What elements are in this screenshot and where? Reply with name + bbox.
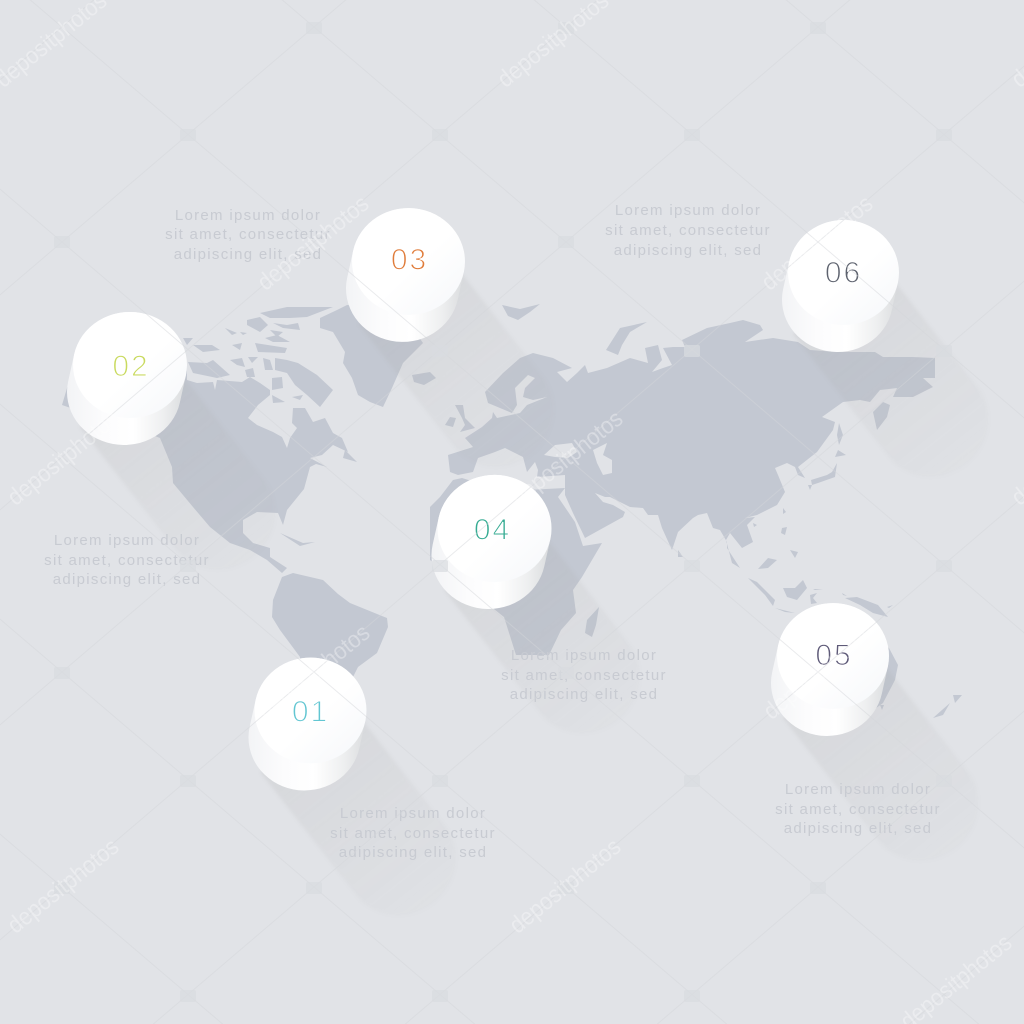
shadow: 05 xyxy=(783,648,978,861)
text: 01: Lorem ipsum dolor xyxy=(340,805,486,822)
text: 04: adipiscing elit, sed xyxy=(510,686,658,703)
continent: Eurasia xyxy=(448,320,935,568)
marker 01: 01 xyxy=(292,696,329,728)
arctic islands xyxy=(183,307,357,546)
text: 06: Lorem ipsum dolor xyxy=(615,202,761,219)
sea cut-outs xyxy=(544,443,612,475)
islands: Sri Lanka, Japan, Sakhalin, Kamchatka side xyxy=(678,402,890,557)
shadow: 03 xyxy=(358,254,554,467)
watermark: depositphotos xyxy=(2,833,124,939)
marker 06 xyxy=(788,220,899,325)
watermark: depositphotos xyxy=(758,619,880,725)
text: 05: sit amet, consectetur xyxy=(775,801,941,818)
island: Greenland xyxy=(320,305,423,407)
marker 05: 05 xyxy=(815,639,853,672)
text: 03: sit amet, consectetur xyxy=(165,226,331,243)
text: 03: Lorem ipsum dolor xyxy=(175,207,321,224)
text: 05: adipiscing elit, sed xyxy=(784,820,932,837)
long shadows xyxy=(80,254,988,915)
shadow: 01 xyxy=(260,702,456,915)
text: 03: adipiscing elit, sed xyxy=(174,246,322,263)
marker 04: 04 xyxy=(474,514,511,546)
island: Madagascar xyxy=(585,607,599,637)
marker 05 xyxy=(777,603,889,709)
continent: Africa xyxy=(430,478,602,655)
marker 06: 06 xyxy=(825,256,862,290)
watermark: depositphotos xyxy=(756,190,878,296)
text: 05: Lorem ipsum dolor xyxy=(785,781,931,798)
shadow: 04 xyxy=(444,520,640,733)
text: 04: Lorem ipsum dolor xyxy=(511,647,657,664)
text: 02: Lorem ipsum dolor xyxy=(54,532,200,549)
continent: South America xyxy=(272,573,388,720)
text: 06: adipiscing elit, sed xyxy=(614,242,762,259)
text: 02: sit amet, consectetur xyxy=(44,552,210,569)
island: New Guinea xyxy=(842,593,893,617)
text: 04: sit amet, consectetur xyxy=(501,667,667,684)
watermark: depositphotos xyxy=(252,190,374,296)
marker 01 xyxy=(254,658,366,763)
marker 02: 02 xyxy=(112,350,150,383)
islands: South East Asia xyxy=(748,508,823,613)
continent: North America xyxy=(62,360,348,573)
text: 02: adipiscing elit, sed xyxy=(53,571,201,588)
text: 01: sit amet, consectetur xyxy=(330,825,496,842)
text: 06: sit amet, consectetur xyxy=(605,222,771,239)
watermark: depositphotos xyxy=(253,619,375,725)
marker 03 xyxy=(352,208,465,315)
watermark: depositphotos xyxy=(506,405,628,511)
marker 02 xyxy=(73,312,187,418)
text blocks xyxy=(44,202,941,861)
shadow: 02 xyxy=(80,357,275,570)
islands: New Zealand xyxy=(933,695,962,718)
islands: Svalbard and Novaya Zemlya xyxy=(502,304,647,355)
marker 04 xyxy=(438,475,552,582)
islands: British Isles xyxy=(445,405,475,432)
watermark: depositphotos xyxy=(2,405,124,511)
continent: Australia xyxy=(800,640,898,720)
watermark: depositphotos xyxy=(504,833,626,939)
shadow: 06 xyxy=(793,264,988,477)
island: Iceland xyxy=(412,372,436,385)
world map xyxy=(62,304,962,720)
text: 01: adipiscing elit, sed xyxy=(339,844,487,861)
marker 03: 03 xyxy=(391,244,428,276)
